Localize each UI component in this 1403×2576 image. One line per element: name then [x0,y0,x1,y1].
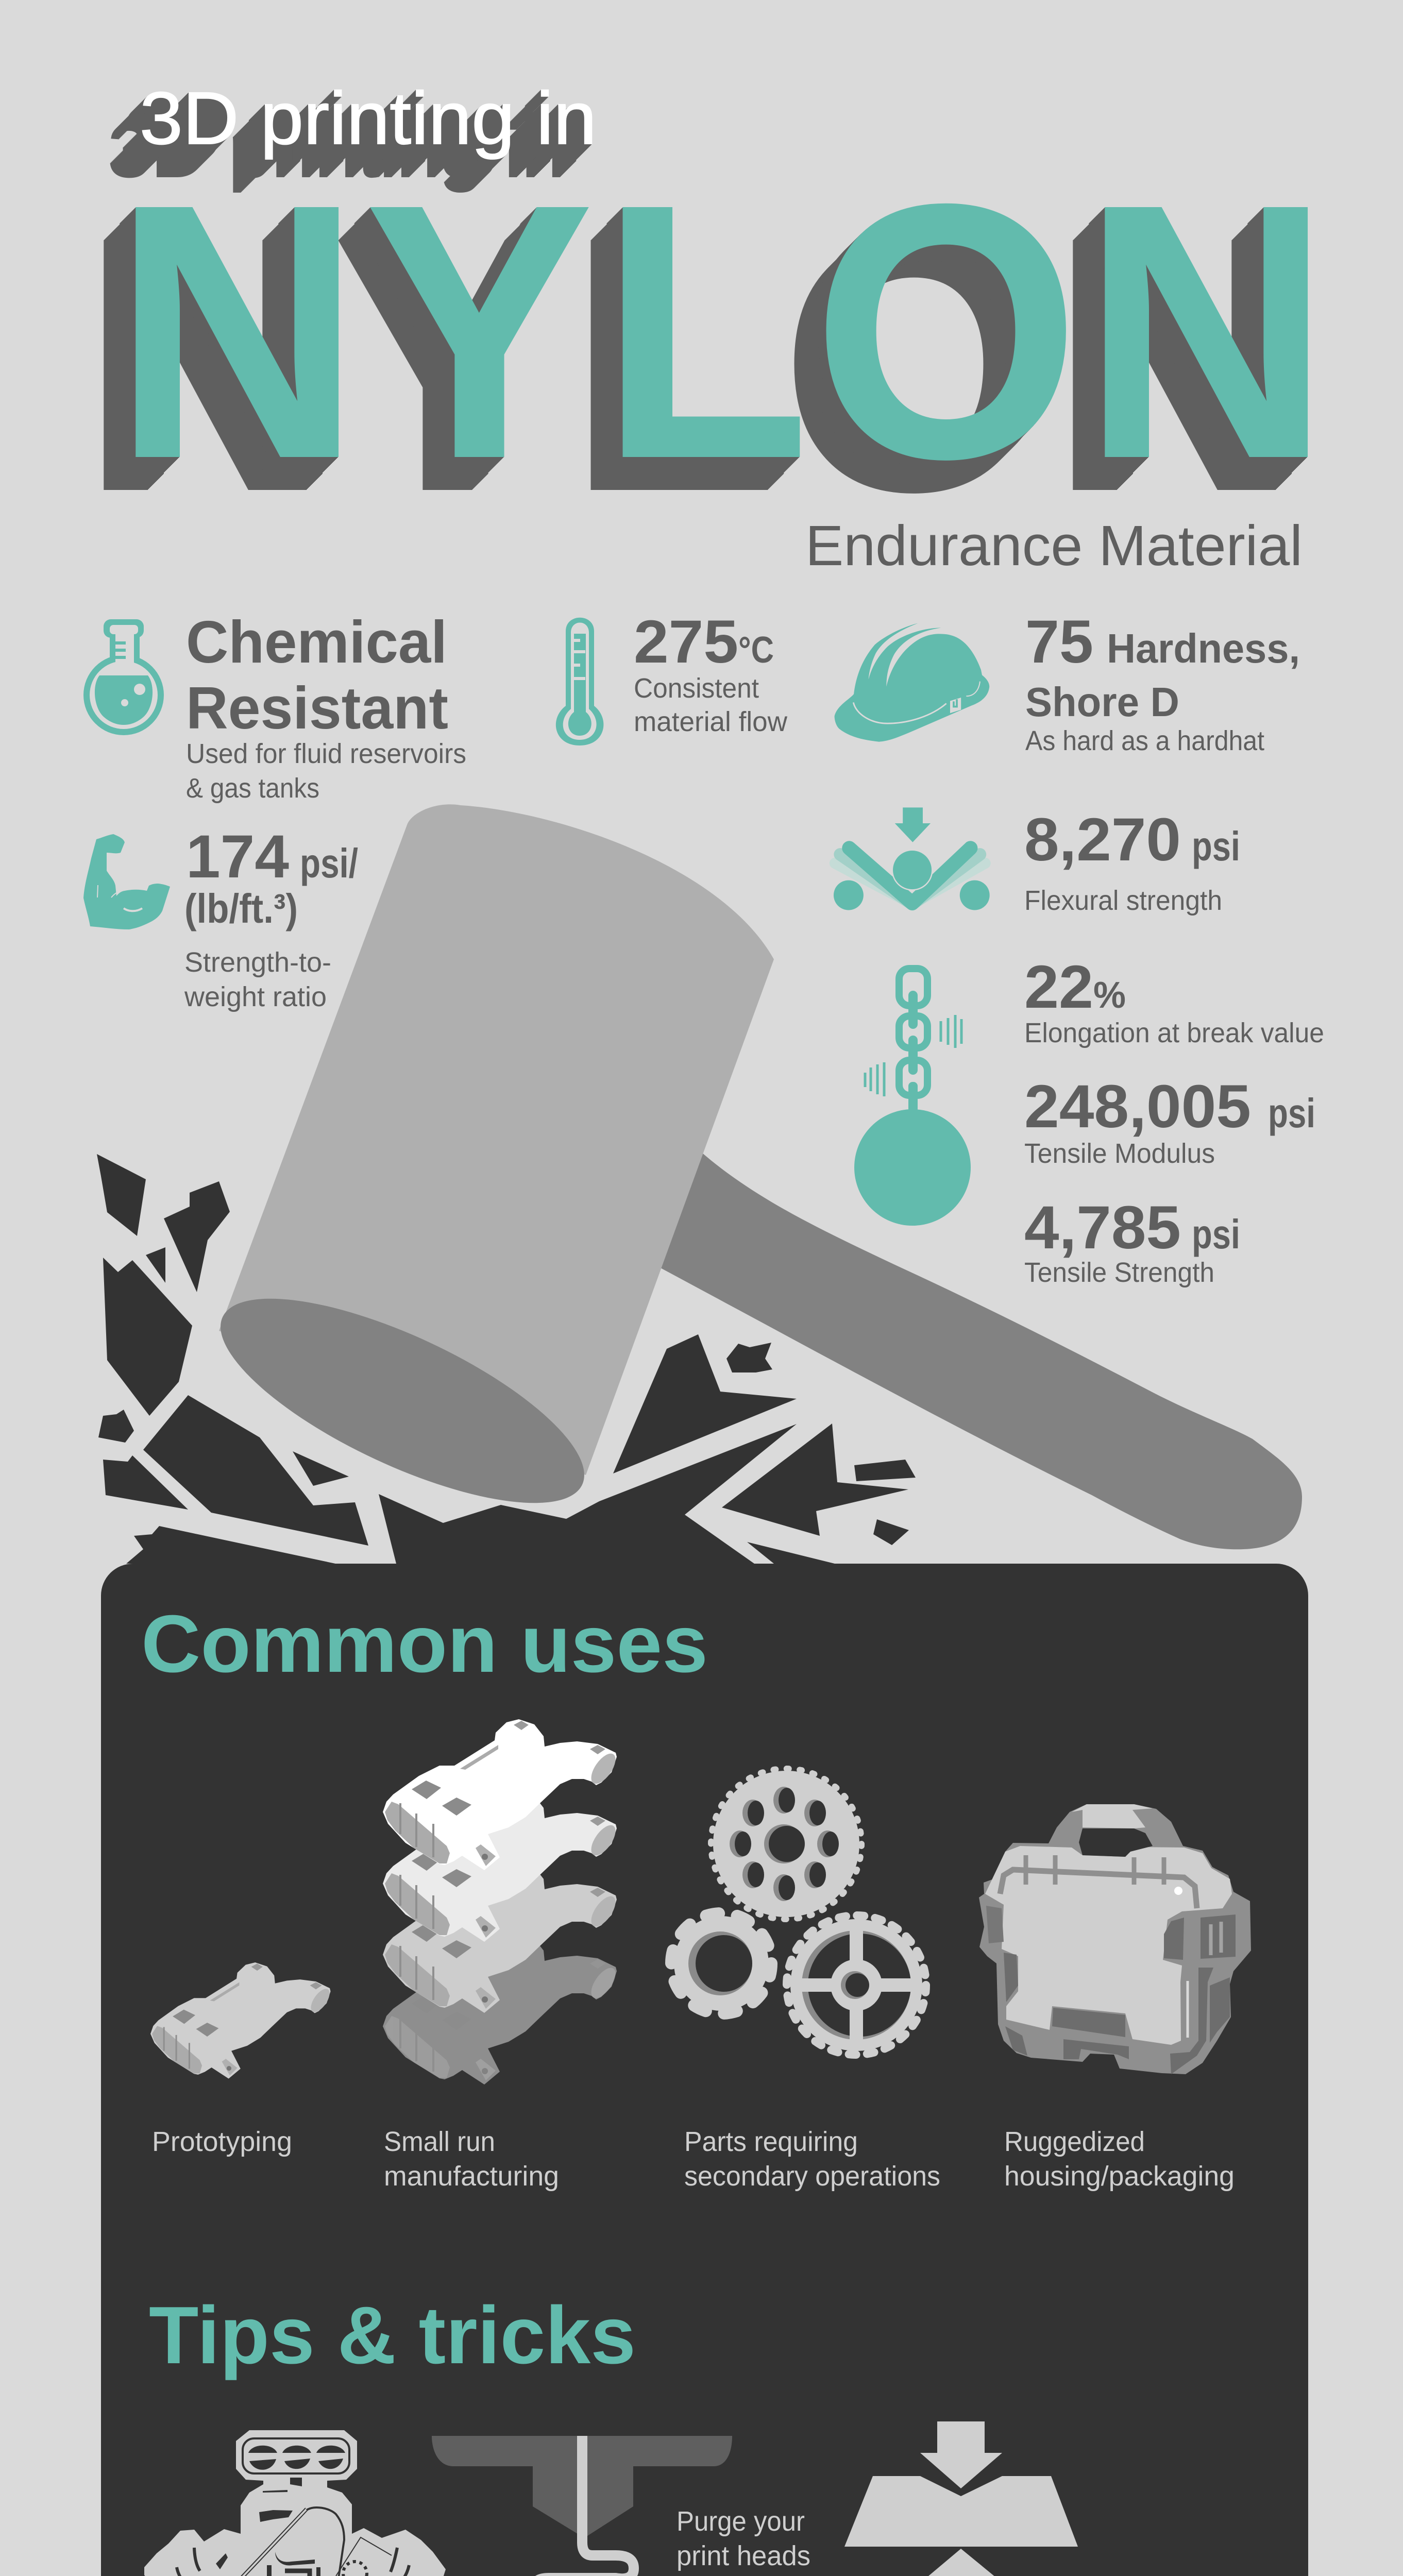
text: parts requiring secondary operations [684,2126,940,2192]
icon: calibrate compression [844,2421,1078,2576]
gear: small ring [671,1913,771,2013]
icon: rugged case [979,1804,1251,2074]
case handle [1072,1804,1153,1828]
text: ruggedized housing/packaging: housing/packaging [1004,2161,1235,2192]
stat: flexural strength [1024,806,1240,916]
title: 3D printing in: 3D printing in [140,77,597,160]
icon: thermometer [556,618,603,745]
subtitle: endurance material: Endurance Material [805,514,1303,578]
stat: hardness: Hardness, [1107,625,1300,671]
icon: chemical flask [83,619,164,735]
stat: elongation: 22 [1024,953,1093,1021]
text: purge print heads: Purge your [677,2506,805,2537]
case details [1000,1870,1197,1908]
stat: strength-to-weight: 174 [186,823,289,891]
stat: tensile modulus: 248,005 [1024,1073,1251,1141]
icon: flexed arm [83,834,170,929]
stat: elongation: Elongation at break value [1024,1018,1324,1048]
stat: strength-to-weight: weight ratio [184,981,327,1012]
text: ruggedized housing/packaging: Ruggedized [1004,2126,1145,2157]
stat: strength-to-weight [184,823,358,1012]
stat: strength-to-weight: (lb/ft.³) [184,886,298,931]
case face [985,1846,1232,2045]
gear: large sprocket [711,1769,861,1919]
stat: tensile modulus [1024,1073,1315,1169]
hammer illustration [195,804,1302,1549]
icon: chain with wrecking ball [854,969,971,1226]
icon: engine [144,2430,446,2576]
text: prototyping: Prototyping [152,2126,292,2157]
heading: common uses: Common uses [141,1599,708,1689]
text: fluid reservoirs [186,738,466,804]
icon: stacked small-run brackets [383,1719,620,2084]
stat: tensile modulus: Tensile Modulus [1024,1138,1215,1169]
stat: flexural strength: Flexural strength [1024,885,1222,916]
heading: chemical resistant: Resistant [186,674,448,741]
heading: chemical resistant [186,608,448,741]
icon: flexural bending [834,807,990,910]
stat: flexural strength: psi [1192,823,1240,869]
case silhouette [979,1804,1251,2074]
text: parts requiring secondary operations: secondary operations [684,2161,940,2192]
icon: hardhat [835,623,989,742]
stat: 275 C: °C [738,630,774,671]
text: purge print heads [676,2506,855,2576]
text: small run manufacturing: manufacturing [384,2161,559,2192]
stat: hardness: 75 [1025,608,1093,676]
stat: tensile strength: 4,785 [1024,1194,1181,1262]
heading: chemical resistant: Chemical [186,608,447,675]
icon: print nozzle and filament [432,2436,732,2576]
panel: dark lower section [101,1564,1308,2576]
heading: tips and tricks: Tips & tricks [149,2290,636,2381]
stat: 275 C [634,608,788,737]
stat: tensile modulus: psi [1268,1090,1315,1136]
text: fluid reservoirs: Used for fluid reservoirs [186,738,466,769]
text: fluid reservoirs: & gas tanks [186,773,319,804]
stat: strength-to-weight: Strength-to- [184,947,331,978]
stat: 275 C: material flow [634,706,788,737]
stat: tensile strength: psi [1192,1211,1240,1257]
stat: hardness [1025,608,1300,756]
cracked floor shards [97,1154,916,1564]
text: purge print heads: print heads [677,2540,810,2571]
stat: hardness: Shore D [1025,679,1179,725]
stat: elongation [1024,953,1324,1048]
text: small run manufacturing [384,2126,559,2192]
text: small run manufacturing: Small run [384,2126,495,2157]
stat: strength-to-weight: psi/ [300,840,358,886]
icon: gears [671,1769,926,2055]
stat: hardness: As hard as a hardhat [1025,725,1264,756]
stat: 275 C: Consistent [634,673,759,704]
gear: spoked [787,1916,926,2055]
text: ruggedized housing/packaging [1004,2126,1235,2192]
stat: elongation: % [1093,975,1126,1016]
stat: tensile strength [1024,1194,1240,1288]
stat: 275 C: 275 [634,608,738,676]
stat: flexural strength: 8,270 [1024,806,1181,874]
icon: single prototype bracket [150,1962,333,2079]
stat: tensile strength: Tensile Strength [1024,1257,1214,1288]
text: parts requiring secondary operations: Parts requiring [684,2126,858,2157]
